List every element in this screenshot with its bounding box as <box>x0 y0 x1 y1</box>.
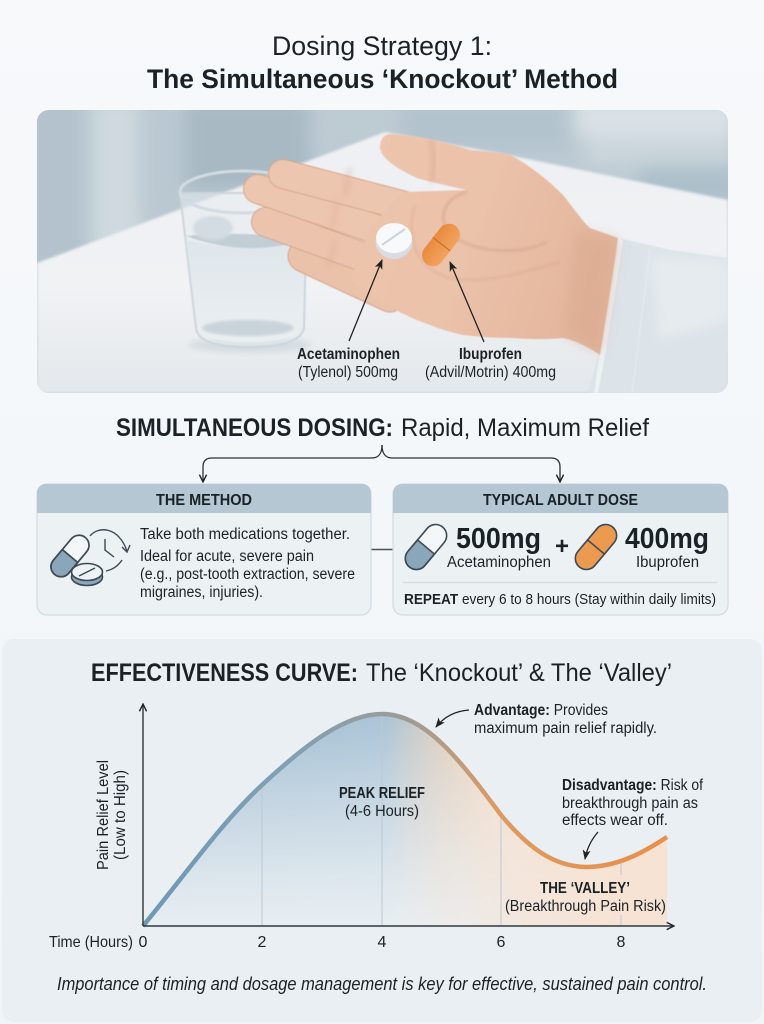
label: acetaminophen: Acetaminophen <box>297 346 400 363</box>
chart: effectiveness curve line <box>143 714 667 926</box>
label: the valley: (Breakthrough Pain Risk) <box>505 898 666 915</box>
title: Dosing Strategy 1: <box>272 31 492 61</box>
icon: white and blue capsule <box>401 520 451 574</box>
pill: ibuprofen <box>422 224 460 266</box>
photo arrows <box>349 260 484 342</box>
section heading: simultaneous dosing <box>116 414 649 442</box>
sleeve <box>588 238 728 393</box>
panel: the method <box>37 484 371 615</box>
chart: grid lines <box>262 716 621 926</box>
label: acetaminophen <box>297 346 400 381</box>
x axis labels: 6 <box>497 934 506 951</box>
title: The Simultaneous ‘Knockout’ Method <box>147 64 618 94</box>
chart: area under curve <box>143 714 667 926</box>
connector between panels <box>371 548 393 550</box>
dose: ibuprofen: 400mg <box>625 523 709 555</box>
label: ibuprofen: Ibuprofen <box>459 346 522 363</box>
label: the valley <box>505 880 666 915</box>
method text: migraines, injuries). <box>140 584 263 601</box>
pill: acetaminophen <box>376 223 412 259</box>
dose: acetaminophen <box>447 523 551 571</box>
label: acetaminophen: (Tylenol) 500mg <box>298 364 398 381</box>
label: the valley: THE ‘VALLEY’ <box>540 880 630 897</box>
plus sign: + <box>555 533 569 560</box>
method text <box>140 526 355 601</box>
dose: acetaminophen: 500mg <box>456 523 541 555</box>
footer note: Importance of timing and dosage management is key for effective, sustained pain control. <box>57 974 707 994</box>
y axis label <box>95 760 129 870</box>
label: peak relief: PEAK RELIEF <box>339 785 425 802</box>
chart heading <box>91 659 672 687</box>
y axis label: Pain Relief Level <box>95 760 112 870</box>
callout: disadvantage <box>562 777 704 859</box>
callout: advantage <box>436 702 657 737</box>
panel: typical adult dose: TYPICAL ADULT DOSE <box>483 492 638 509</box>
icon: orange capsule <box>571 520 621 574</box>
glass of water <box>180 171 312 353</box>
repeat note: REPEAT every 6 to 8 hours (Stay within daily limits) <box>404 591 716 608</box>
icon: pills and clock <box>47 530 130 586</box>
callout: disadvantage: breakthrough pain as <box>562 795 698 812</box>
x axis labels: 2 <box>258 934 267 951</box>
x axis labels <box>49 934 626 951</box>
bracket arrows <box>203 445 560 481</box>
callout: advantage: Advantage: Provides <box>474 702 608 719</box>
label: ibuprofen: (Advil/Motrin) 400mg <box>425 364 556 381</box>
method text: Take both medications together. <box>140 526 350 543</box>
method text: (e.g., post-tooth extraction, severe <box>140 566 355 583</box>
callout: disadvantage: Disadvantage: Risk of <box>562 777 704 794</box>
hand shading <box>565 232 618 352</box>
section heading: simultaneous dosing: SIMULTANEOUS DOSING: <box>116 414 393 442</box>
chart heading: The ‘Knockout’ & The ‘Valley’ <box>366 659 672 687</box>
dose: acetaminophen: Acetaminophen <box>447 554 551 571</box>
hand <box>258 134 618 355</box>
title <box>147 31 618 94</box>
dose: ibuprofen: Ibuprofen <box>636 554 699 571</box>
dose: ibuprofen <box>625 523 709 571</box>
fingers <box>258 174 405 296</box>
panel: the method: THE METHOD <box>156 492 252 509</box>
x axis labels: Time (Hours) <box>49 934 133 951</box>
panel: typical adult dose <box>393 484 728 615</box>
x axis labels: 0 <box>139 934 148 951</box>
label: peak relief <box>339 785 425 820</box>
y axis label: (Low to High) <box>112 770 129 860</box>
label: peak relief: (4-6 Hours) <box>345 803 419 820</box>
chart: axes <box>143 705 673 926</box>
section heading: simultaneous dosing: Rapid, Maximum Relief <box>401 414 649 442</box>
label: ibuprofen <box>425 346 556 381</box>
chart heading: EFFECTIVENESS CURVE: <box>91 659 358 687</box>
x axis labels: 4 <box>378 934 387 951</box>
callout: advantage: maximum pain relief rapidly. <box>474 720 657 737</box>
x axis labels: 8 <box>617 934 626 951</box>
palm and thumb <box>350 134 618 355</box>
photo: hand holding two pills beside a glass of water <box>20 100 740 393</box>
method text: Ideal for acute, severe pain <box>140 548 314 565</box>
callout: disadvantage: effects wear off. <box>562 812 668 829</box>
panel: effectiveness curve <box>2 639 762 1022</box>
